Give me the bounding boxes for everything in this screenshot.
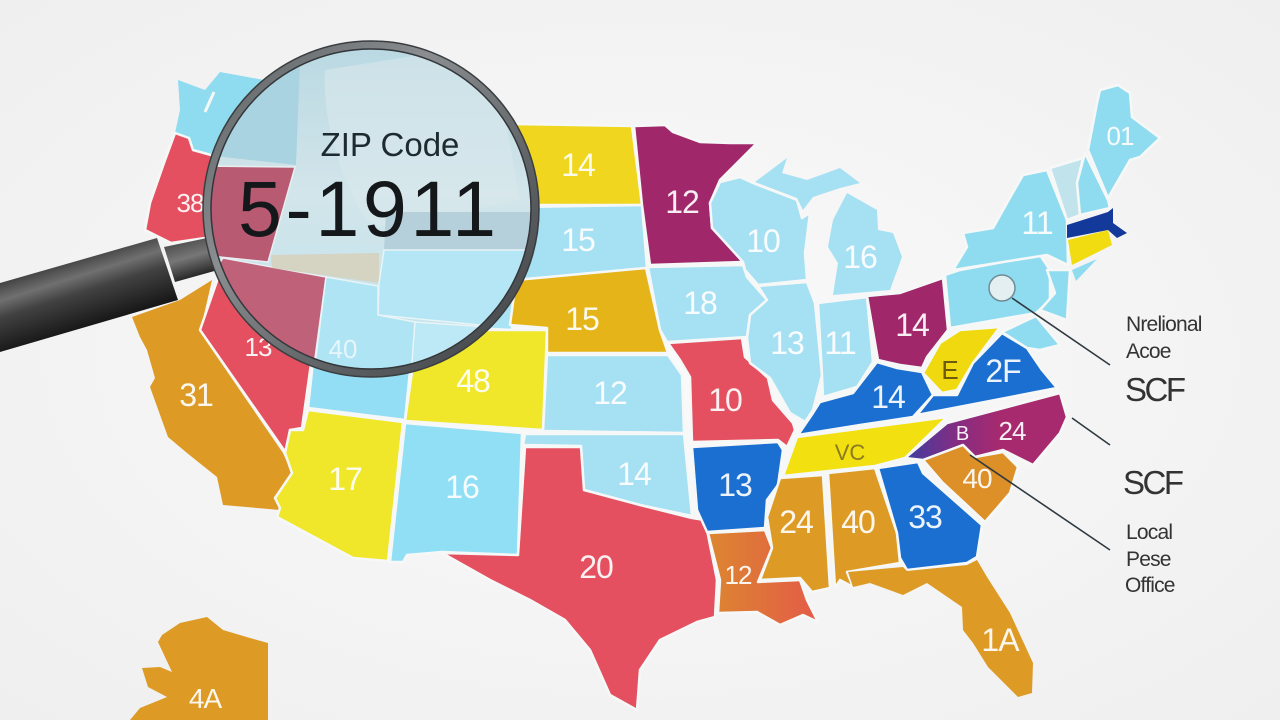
- state: South Dakota: [516, 205, 647, 280]
- state: West Virginia: E: [941, 355, 959, 385]
- state: Vermont: [1050, 158, 1083, 220]
- state: Florida: [848, 560, 1033, 697]
- state: New York: 11: [1021, 205, 1053, 241]
- state: Arizona: [275, 410, 403, 561]
- state: South Carolina: [923, 445, 1018, 522]
- state: Indiana: 11: [824, 325, 856, 361]
- state: New Mexico: [390, 423, 522, 562]
- state: Colorado: [405, 330, 547, 430]
- state: Virginia: [917, 333, 1057, 415]
- state: Nebraska: 15: [565, 301, 599, 337]
- lens: Nevada: [220, 258, 326, 358]
- state: California: 31: [179, 377, 213, 413]
- lens: glare: [324, 56, 510, 152]
- state: Florida: 1A: [981, 622, 1020, 658]
- state: Ohio: [867, 278, 948, 368]
- state: Connecticut: [1068, 230, 1112, 265]
- state: Nevada: [200, 258, 323, 453]
- label: national area SCF: Acoe: [1126, 340, 1171, 363]
- label: local post office: Pese: [1126, 548, 1171, 571]
- state: Wisconsin: [710, 177, 810, 285]
- handle: [0, 238, 218, 352]
- state: Arkansas: [692, 442, 783, 532]
- state: Maine: 01: [1107, 121, 1134, 151]
- lens: Oregon: [200, 166, 295, 262]
- state: North Carolina: 24: [999, 416, 1026, 446]
- state: Kansas: 12: [593, 375, 627, 411]
- lens: Washington highlight: [220, 66, 300, 165]
- lens: [200, 40, 545, 390]
- lens value: 5-1911: 5-1911: [238, 164, 496, 253]
- state: Virginia: 2F: [985, 353, 1021, 389]
- state: Michigan: 16: [843, 239, 877, 275]
- state: West Virginia: [923, 327, 1000, 393]
- lens rim: [203, 41, 539, 377]
- state: Tennessee: [783, 417, 947, 476]
- state: Alabama: 40: [841, 504, 875, 540]
- state: Alabama: [828, 468, 900, 588]
- state: Oklahoma: [523, 434, 692, 516]
- state: Indiana: [818, 297, 873, 397]
- label: local post office: [1125, 521, 1175, 597]
- state: South Dakota: 15: [561, 222, 595, 258]
- state: Texas: [442, 447, 717, 710]
- state: Upper Michigan: [755, 158, 860, 210]
- state: Louisiana: 12: [725, 560, 752, 590]
- state: Ohio: 14: [895, 307, 929, 343]
- state: Minnesota: [634, 125, 757, 265]
- label: national area SCF: [1125, 313, 1202, 408]
- state: Arizona: 17: [328, 461, 362, 497]
- label: national area SCF: SCF: [1125, 371, 1185, 408]
- lens: Utah: [316, 276, 416, 368]
- state: Arkansas: 13: [718, 467, 752, 503]
- state: Mississippi: 24: [779, 504, 813, 540]
- label: local post office: Local: [1126, 521, 1172, 544]
- state: Washington: [175, 72, 310, 165]
- lens: Idaho strip: [271, 253, 379, 283]
- callout marker: [989, 275, 1015, 301]
- state: New Hampshire: [1077, 153, 1110, 215]
- label: local post office: Office: [1125, 574, 1175, 597]
- state: New York: [953, 170, 1068, 270]
- state: Georgia: 33: [908, 499, 942, 535]
- state: Iowa: 18: [683, 285, 717, 321]
- lens: map label: 40: [329, 334, 357, 364]
- state: Wisconsin: 10: [746, 223, 780, 259]
- state: Mississippi: [760, 475, 830, 592]
- state: Minnesota: 12: [665, 184, 699, 220]
- state: Iowa: [648, 265, 767, 342]
- state: Maine: [1088, 85, 1160, 198]
- state: Maryland: [1002, 316, 1060, 350]
- state: Pennsylvania: [945, 255, 1050, 328]
- state: Oklahoma: 14: [617, 456, 651, 492]
- state: Wyoming and Idaho: [378, 250, 520, 330]
- state: Kentucky: [798, 362, 933, 435]
- magnifying glass: [0, 40, 545, 390]
- state: Oregon: 38: [177, 188, 204, 218]
- state: Missouri: 10: [708, 382, 742, 418]
- state: Alaska: 4A: [189, 683, 222, 714]
- lens heading: ZIP Code: ZIP Code: [321, 126, 459, 163]
- state: Nevada: 13: [245, 332, 272, 362]
- state: Georgia: [878, 462, 982, 570]
- state: Kentucky: 14: [871, 379, 905, 415]
- label: SCF: SCF: [1123, 464, 1183, 501]
- state: Massachusetts: [1067, 208, 1127, 238]
- state: Illinois: [747, 282, 822, 422]
- state: Oregon: [145, 133, 295, 262]
- state: Illinois: 13: [770, 325, 804, 361]
- label: national area SCF: Nrelional: [1126, 313, 1202, 336]
- lens: lower state: [411, 321, 479, 363]
- state: Tennessee: VC: [835, 440, 865, 465]
- state: South Carolina: 40: [962, 463, 992, 494]
- state: Utah: [308, 278, 415, 420]
- state: Texas: 20: [579, 549, 613, 585]
- state: North Carolina: [905, 393, 1067, 465]
- state: Missouri: [668, 338, 795, 447]
- state: Alaska: [130, 617, 268, 720]
- state: Colorado: 48: [456, 363, 490, 399]
- state: North Dakota: [516, 124, 642, 205]
- state: Kansas: [543, 355, 684, 433]
- lens: Wyoming: [378, 250, 530, 330]
- state: Nebraska: [510, 268, 668, 353]
- map of the United States: [130, 72, 1160, 720]
- state: Long Island: [1072, 259, 1097, 281]
- state: California: [132, 280, 292, 510]
- callout leader lines: [970, 298, 1110, 550]
- state: North Carolina: B: [956, 423, 969, 445]
- state: New Jersey and Delaware: [1040, 270, 1070, 320]
- lens: Montana: [384, 212, 530, 250]
- state: Louisiana: [708, 530, 818, 625]
- state: New Mexico: 16: [445, 469, 479, 505]
- state: North Dakota: 14: [561, 147, 595, 183]
- state: Michigan: [828, 193, 902, 295]
